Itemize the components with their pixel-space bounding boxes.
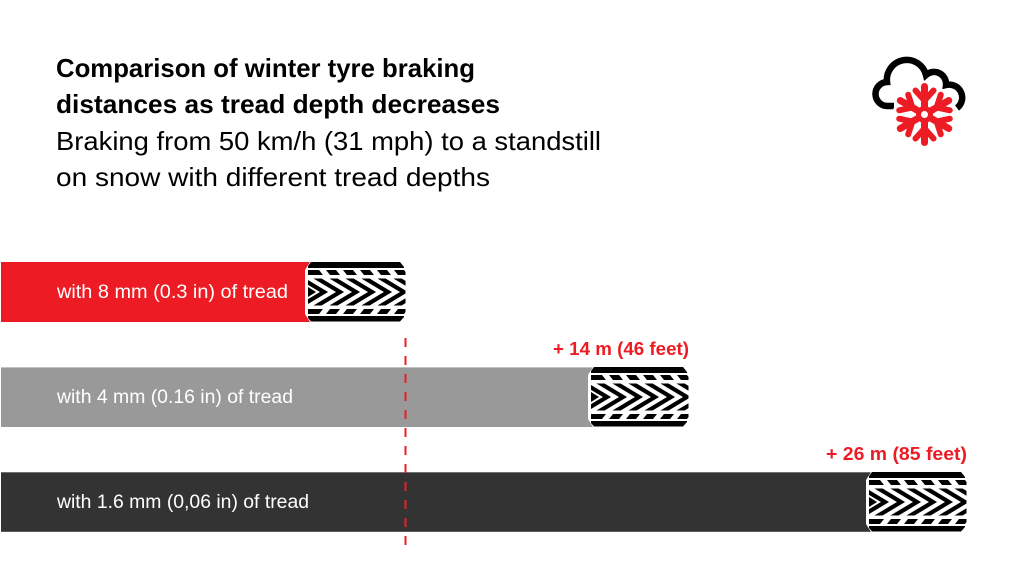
subtitle <box>56 126 601 192</box>
icon: snow cloud <box>875 60 962 142</box>
title: distances as tread depth decreases <box>56 89 500 119</box>
callout: +14 m: + 14 m (46 feet) <box>553 339 689 359</box>
icon: tyre tread <box>842 472 981 532</box>
callout: +26 m: + 26 m (85 feet) <box>826 444 967 464</box>
bar: 1.6 mm of tread <box>1 472 981 532</box>
bar: 8 mm of tread <box>1 262 420 322</box>
subtitle: Braking from 50 km/h (31 mph) to a standstill <box>56 126 601 156</box>
bar: 4 mm of tread: with 4 mm (0.16 in) of tread <box>56 387 293 408</box>
icon: tyre tread <box>564 367 703 427</box>
title <box>56 53 500 119</box>
bar: 4 mm of tread <box>1 367 703 427</box>
subtitle: on snow with different tread depths <box>56 162 490 192</box>
icon: tyre tread <box>281 262 420 322</box>
title: Comparison of winter tyre braking <box>56 53 475 83</box>
reference line: 8 mm stopping point <box>404 338 406 548</box>
bar: 8 mm of tread: with 8 mm (0.3 in) of tread <box>56 282 288 303</box>
bar: 1.6 mm of tread: with 1.6 mm (0,06 in) of tread <box>56 492 309 513</box>
